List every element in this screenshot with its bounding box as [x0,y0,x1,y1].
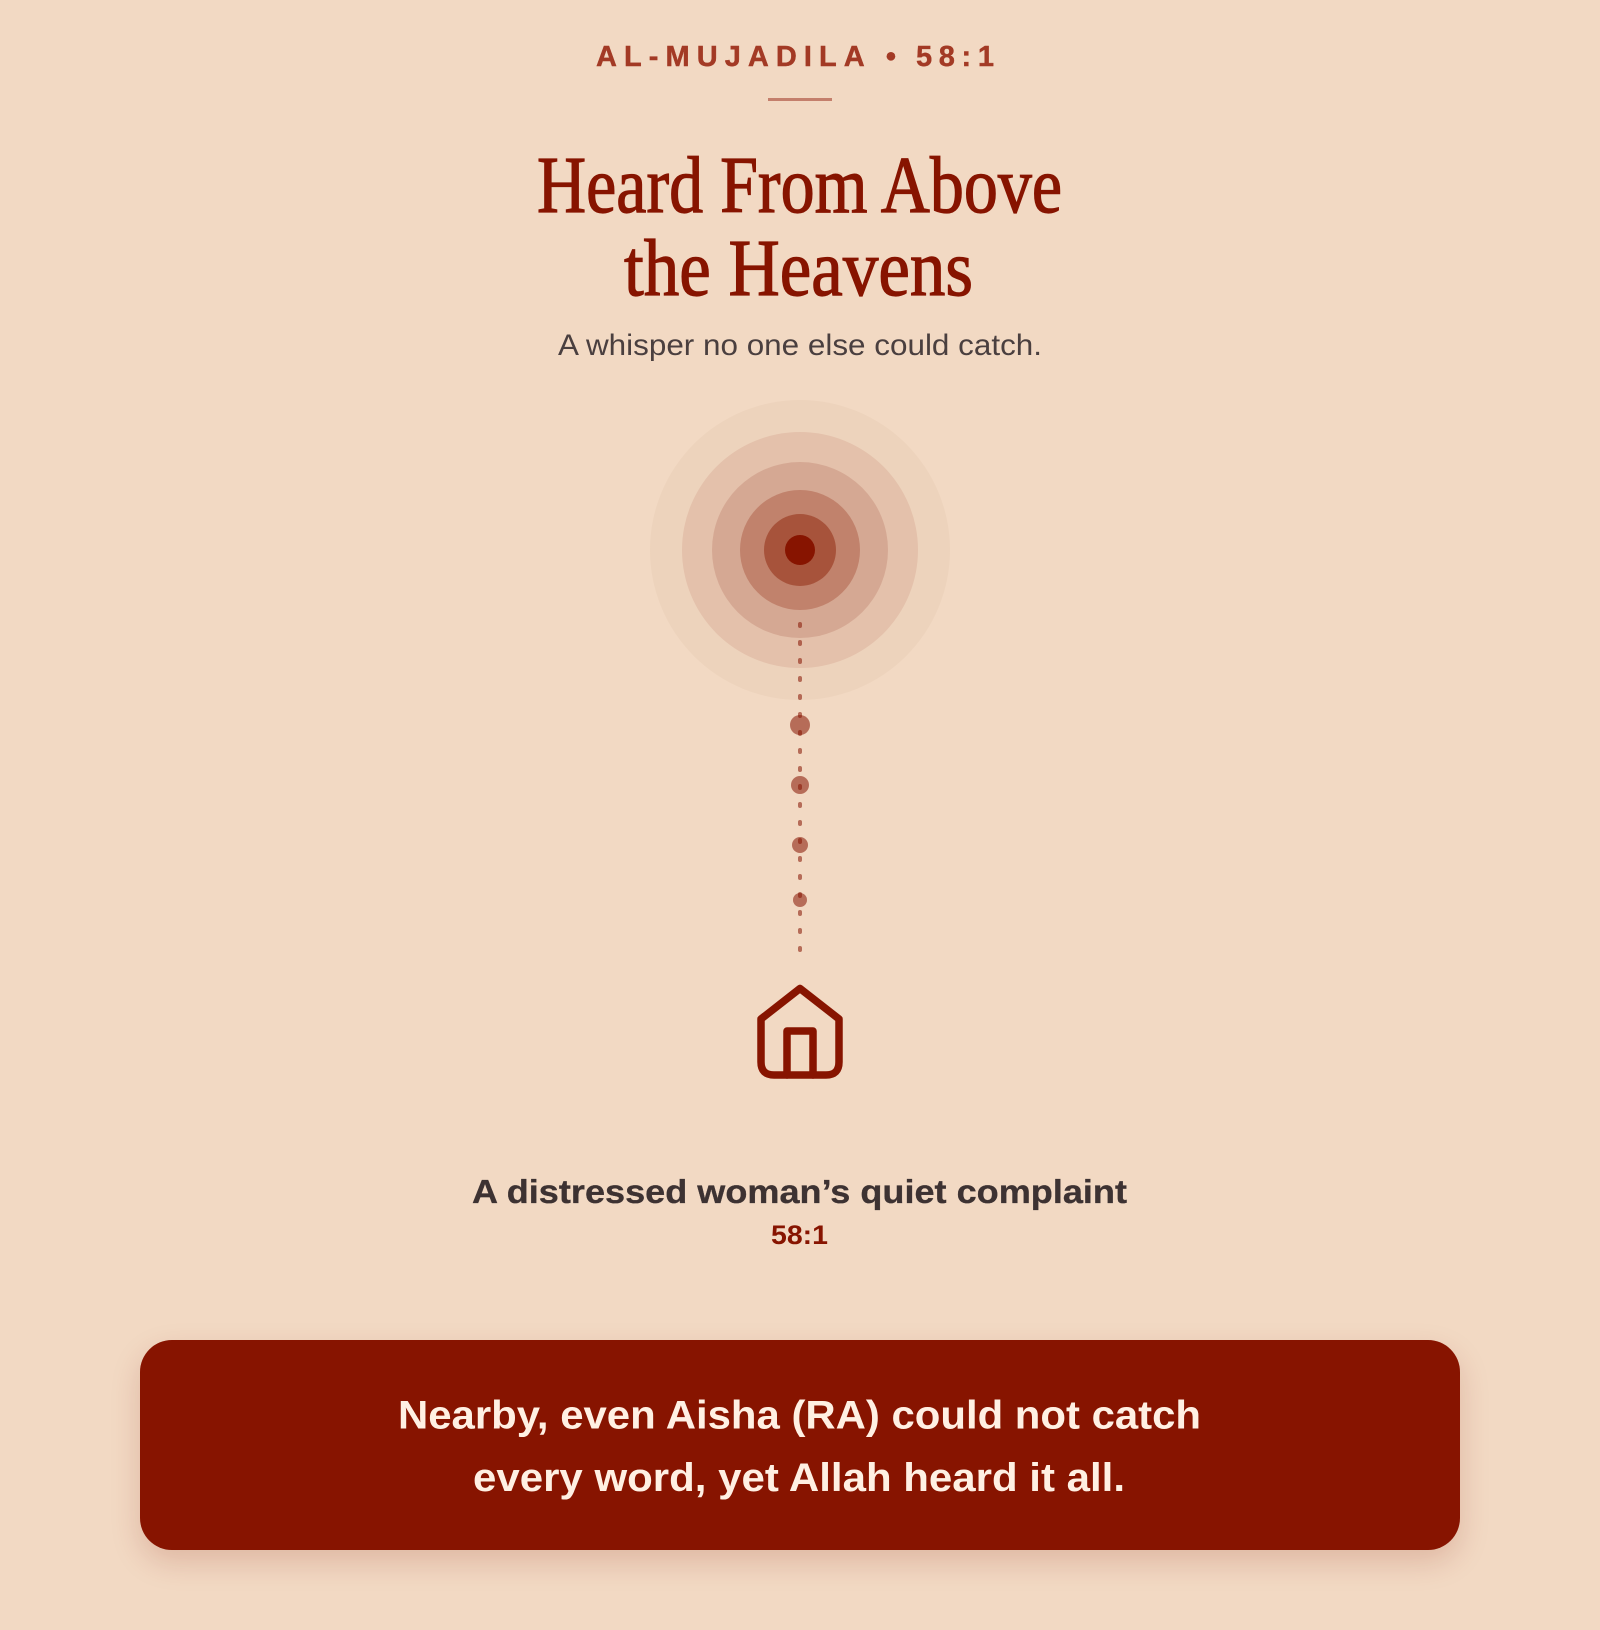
callout text: every word, yet Allah heard it all. [473,1456,1125,1500]
eyebrow label: AL-MUJADILA • [596,41,896,73]
title: Heard From Above [537,142,1062,230]
title: the Heavens [624,225,973,313]
subtitle: A whisper no one else could catch. [558,329,1042,362]
falling sound dots [790,715,810,907]
callout card background [140,1340,1460,1550]
verse reference: 58:1 [771,1220,828,1250]
eyebrow label: 58:1 [916,41,994,73]
callout text: Nearby, even Aisha (RA) could not catch [398,1394,1201,1438]
dotted line from rings to house [798,624,802,952]
callout text [398,1394,1201,1500]
caption: A distressed woman’s quiet complaint [472,1173,1127,1210]
icon: house [761,988,839,1075]
divider [768,98,832,101]
title [537,142,1062,313]
concentric sound rings [650,400,950,700]
